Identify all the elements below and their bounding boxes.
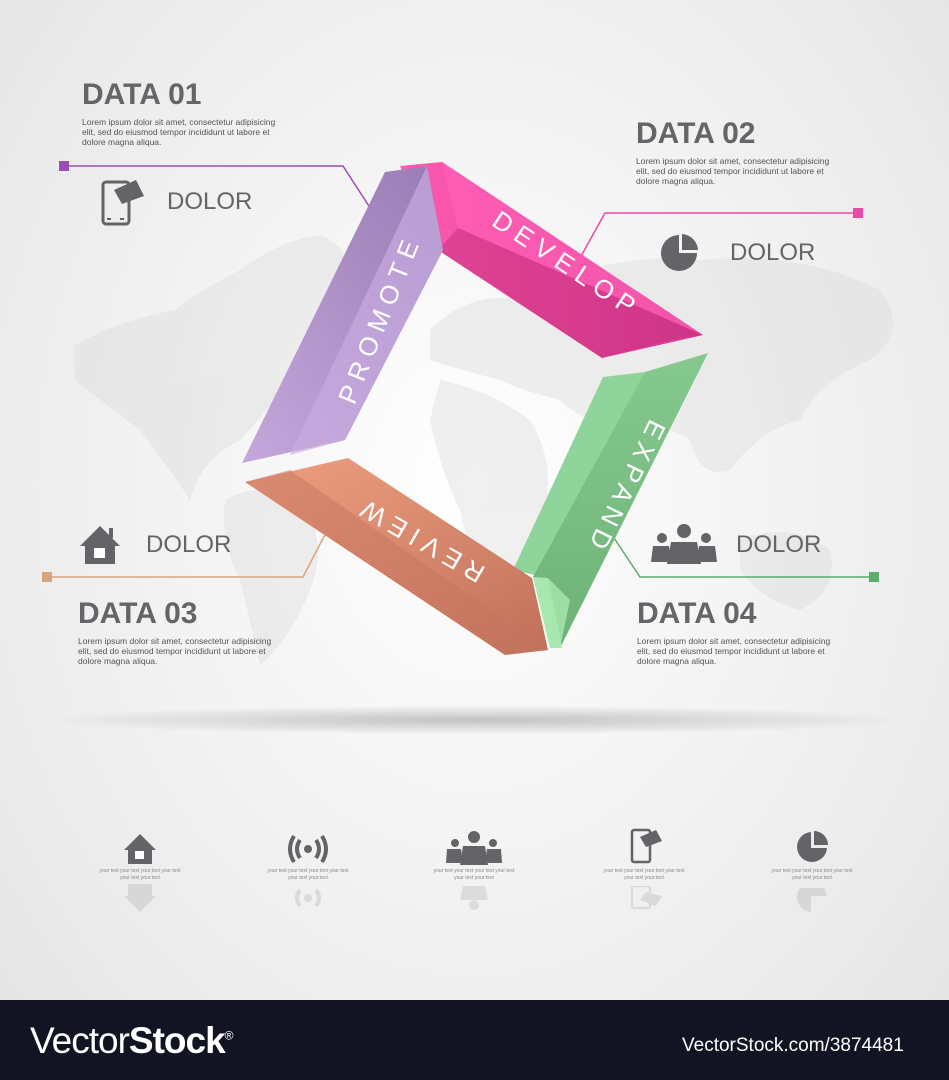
icon item: signal: your text your text your text your text bbox=[268, 868, 348, 874]
text block: Lorem ipsum dolor sit amet, consectetur adipisicing elit, sed do eiusmod tempor incididunt ut labore et dolore magna aliqua. bbox=[82, 117, 275, 147]
heading: DATA 01 bbox=[82, 78, 201, 111]
panel: data 03 bbox=[78, 597, 271, 666]
panel: data 04 bbox=[637, 597, 830, 666]
panel: data 04: DATA 04 bbox=[637, 597, 756, 630]
icon item: pie: your text your text your text your text bbox=[772, 868, 852, 874]
panel: data 04: Lorem ipsum dolor sit amet, consectetur adipisicing elit, sed do eiusmod tempor incididunt ut labore et dolore magna aliqua. bbox=[637, 636, 830, 666]
panel: data 02 bbox=[636, 117, 829, 186]
icon item: phone mail: your text your text your text your text bbox=[604, 868, 684, 874]
icon item: house: your text your text bbox=[120, 875, 160, 881]
bar: promote bbox=[242, 166, 443, 463]
icon item: house: your text your text your text your text bbox=[100, 868, 180, 874]
footer url: VectorStock.com/3874481 bbox=[682, 1035, 904, 1056]
bar: review: REVIEW bbox=[349, 491, 490, 589]
panel: data 03: Lorem ipsum dolor sit amet, consectetur adipisicing elit, sed do eiusmod tempor incididunt ut labore et dolore magna aliqua. bbox=[78, 636, 271, 666]
label dolor 2: DOLOR bbox=[730, 239, 815, 266]
icon item: pie bbox=[772, 831, 852, 912]
icon item: signal bbox=[268, 835, 348, 907]
icon: house bbox=[80, 526, 120, 564]
panel: data 01 bbox=[82, 78, 275, 147]
label dolor 3: DOLOR bbox=[146, 531, 231, 558]
icon item: phone mail bbox=[604, 828, 684, 910]
panel: data 02: Lorem ipsum dolor sit amet, consectetur adipisicing elit, sed do eiusmod tempor incididunt ut labore et dolore magna aliqua. bbox=[636, 156, 829, 186]
icon: people bbox=[651, 524, 717, 564]
icon: pie chart bbox=[661, 234, 698, 271]
icon item: people: your text your text bbox=[454, 875, 494, 881]
bar: develop bbox=[400, 162, 703, 358]
icon item: people: your text your text your text your text bbox=[434, 868, 514, 874]
footer logo: VectorStock® bbox=[30, 1020, 233, 1061]
label dolor 4: DOLOR bbox=[736, 531, 821, 558]
bar: expand bbox=[513, 353, 708, 648]
bar: develop: DEVELOP bbox=[487, 205, 647, 324]
panel: data 02: DATA 02 bbox=[636, 117, 755, 150]
icon item: phone mail: your text your text bbox=[624, 875, 664, 881]
bar: expand: EXPAND bbox=[580, 415, 672, 561]
icon item: pie: your text your text bbox=[792, 875, 832, 881]
icon: phone with mail bbox=[102, 180, 144, 226]
icon item: house bbox=[100, 834, 180, 912]
shadow under diagram bbox=[40, 705, 910, 735]
icon item: people bbox=[434, 831, 514, 910]
panel: data 03: DATA 03 bbox=[78, 597, 197, 630]
bar: promote: PROMOTE bbox=[332, 229, 427, 408]
icon item: signal: your text your text bbox=[288, 875, 328, 881]
label dolor 1: DOLOR bbox=[167, 188, 252, 215]
bar: review bbox=[245, 458, 548, 655]
bottom icon row bbox=[100, 828, 852, 912]
footer bbox=[0, 1000, 949, 1080]
